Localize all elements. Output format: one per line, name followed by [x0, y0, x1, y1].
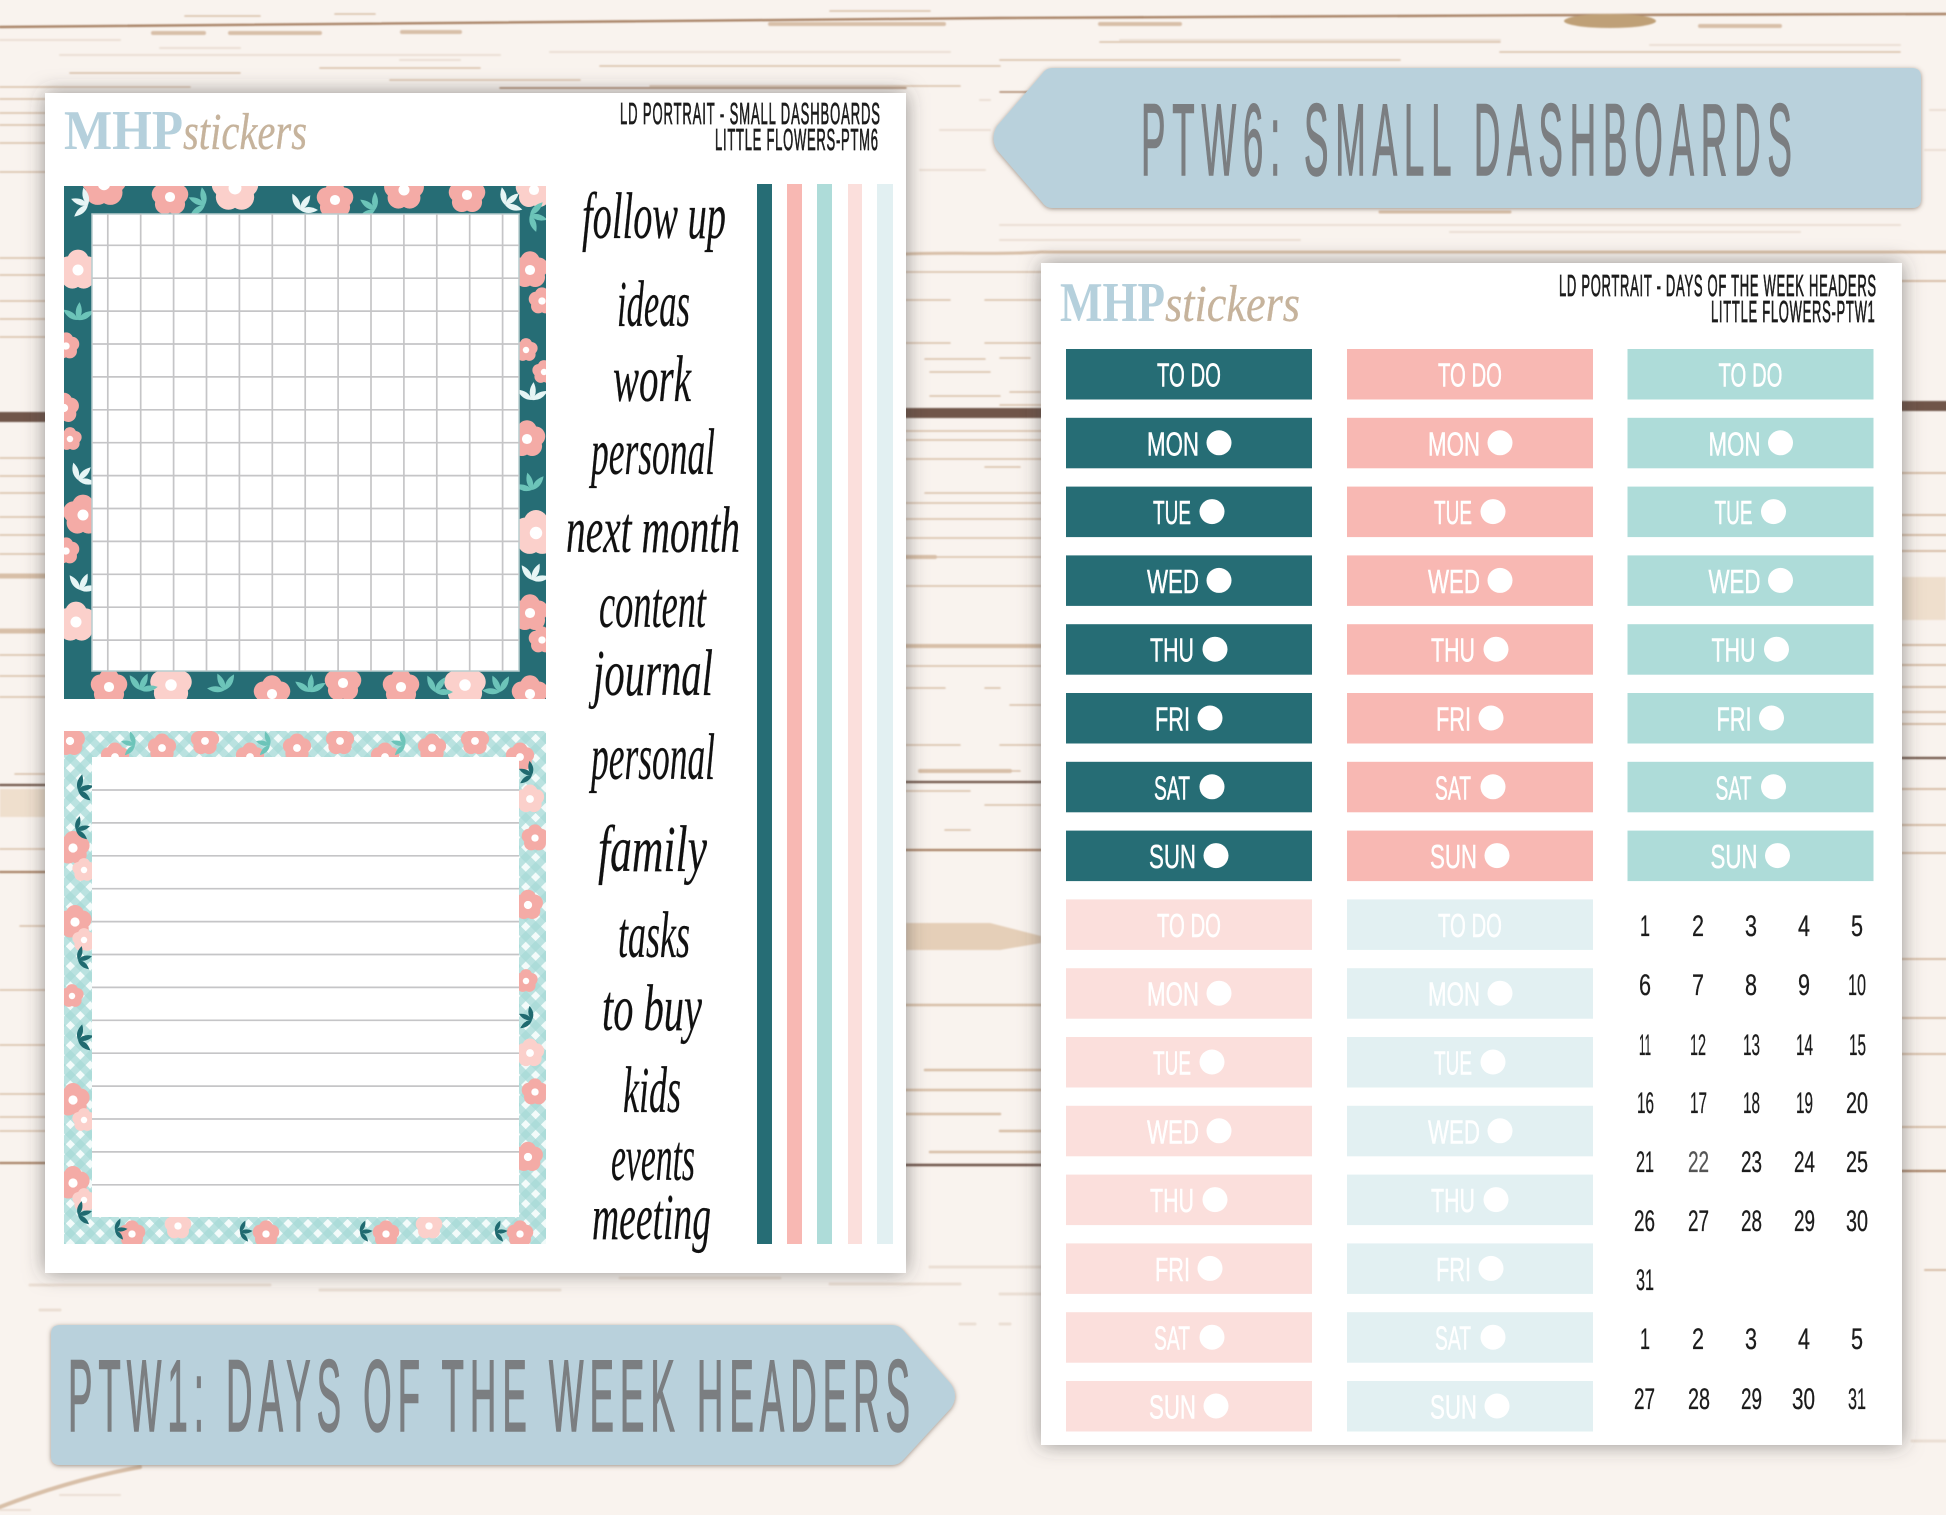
row: tue [1066, 1037, 1312, 1088]
date number stickers: 7 [1692, 969, 1704, 1002]
row: to do [1347, 899, 1593, 950]
date number stickers: 3 [1745, 910, 1757, 943]
row: tue [1347, 487, 1593, 537]
row: thu [1347, 624, 1593, 675]
row: sat: SAT [1435, 1320, 1471, 1357]
row: sat: SAT [1435, 769, 1471, 806]
date number stickers: 30 [1792, 1383, 1815, 1416]
row: thu: THU [1712, 632, 1756, 669]
row: fri: FRI [1436, 1251, 1471, 1288]
date number stickers: 1 [1640, 1323, 1650, 1356]
sheet title [620, 97, 880, 158]
date number stickers: 10 [1848, 969, 1866, 1002]
date number stickers [1634, 910, 1868, 1416]
sheet: PTW1 days of the week headers [1041, 263, 1902, 1445]
date number stickers: 3 [1745, 1323, 1757, 1356]
row: to do: TO DO [1718, 356, 1782, 394]
script word stickers: meeting [592, 1181, 711, 1254]
row: wed [1347, 555, 1593, 606]
row: to do [1066, 349, 1312, 400]
row: to do: TO DO [1157, 356, 1221, 394]
row: fri: FRI [1155, 700, 1190, 738]
row: sat [1066, 762, 1312, 812]
date number stickers: 27 [1634, 1383, 1655, 1416]
row: mon [1066, 418, 1312, 468]
date number stickers: 8 [1745, 969, 1757, 1002]
date number stickers: 22 [1688, 1146, 1709, 1179]
logo: MHP stickers [1060, 272, 1300, 334]
date number stickers: 18 [1743, 1087, 1760, 1120]
row: mon [1347, 418, 1593, 468]
row: sun: SUN [1430, 838, 1477, 875]
script word stickers: content [599, 569, 707, 642]
date number stickers: 28 [1688, 1383, 1710, 1416]
sheet title: LITTLE FLOWERS-PTM6 [715, 123, 878, 158]
row: wed: WED [1147, 1113, 1199, 1150]
date number stickers: 27 [1688, 1205, 1709, 1238]
script word stickers: family [598, 813, 707, 886]
sheet title: LD PORTRAIT - DAYS OF THE WEEK HEADERS [1559, 269, 1876, 304]
row: sat: SAT [1154, 1320, 1190, 1357]
row: wed [1066, 555, 1312, 606]
row: mon [1628, 418, 1874, 468]
row: tue [1066, 487, 1312, 537]
row: thu: THU [1431, 1182, 1475, 1219]
date number stickers: 2 [1692, 910, 1704, 943]
row: sat [1347, 762, 1593, 812]
row: tue: TUE [1434, 1044, 1472, 1082]
row: sun: SUN [1149, 838, 1196, 875]
date number stickers: 5 [1851, 1323, 1863, 1356]
row: fri [1066, 693, 1312, 744]
banner: PTW1 days of the week headers: PTW1: DAYS OF THE WEEK HEADERS [68, 1341, 910, 1454]
row: mon: MON [1428, 976, 1480, 1013]
logo: MHP stickers [64, 100, 307, 162]
row: to do: TO DO [1157, 907, 1221, 944]
date number stickers: 28 [1741, 1205, 1762, 1238]
banner: PTW6 small dashboards [994, 68, 1921, 208]
sheet: PTM6 small dashboards [45, 93, 906, 1273]
date number stickers: 11 [1639, 1029, 1651, 1062]
sheet title: LITTLE FLOWERS-PTW1 [1711, 295, 1875, 330]
row: to do [1066, 899, 1312, 950]
row: thu [1347, 1175, 1593, 1225]
date number stickers: 13 [1743, 1029, 1760, 1062]
logo: MHP stickers: stickers [183, 104, 307, 161]
row: sun: SUN [1430, 1388, 1477, 1426]
row: sat: SAT [1716, 769, 1752, 806]
row: sun: SUN [1710, 838, 1758, 875]
script word stickers: follow up [582, 180, 726, 253]
row: mon: MON [1428, 425, 1480, 462]
row: sun [1066, 831, 1312, 881]
date number stickers: 25 [1846, 1146, 1868, 1179]
date number stickers: 19 [1796, 1087, 1813, 1120]
row: sat [1628, 762, 1874, 812]
washi stripes [757, 184, 893, 1244]
date number stickers: 23 [1741, 1146, 1762, 1179]
date number stickers: 20 [1846, 1087, 1868, 1120]
script word stickers: personal [589, 416, 715, 489]
logo: MHP stickers: MHP [64, 100, 183, 162]
row: sun: SUN [1149, 1388, 1196, 1426]
row: to do: TO DO [1438, 356, 1502, 394]
logo: MHP stickers: stickers [1165, 276, 1300, 333]
row: mon: MON [1147, 425, 1199, 462]
sheet title [1559, 269, 1876, 330]
script word stickers: work [613, 343, 692, 416]
date number stickers: 31 [1636, 1264, 1654, 1297]
column: light blue headers [1347, 899, 1593, 1432]
row: wed: WED [1428, 563, 1480, 600]
date number stickers: 15 [1849, 1029, 1866, 1062]
row: sun [1347, 831, 1593, 881]
date number stickers: 2 [1692, 1323, 1704, 1356]
row: sun [1066, 1381, 1312, 1432]
row: sat [1347, 1312, 1593, 1363]
column: pink headers [1347, 349, 1593, 881]
row: tue [1347, 1037, 1593, 1088]
row: fri [1628, 693, 1874, 744]
row: wed: WED [1147, 563, 1199, 600]
date number stickers: 30 [1846, 1205, 1868, 1238]
script word stickers [566, 180, 740, 1254]
date number stickers: 1 [1640, 910, 1650, 943]
date number stickers: 24 [1794, 1146, 1815, 1179]
row: fri: FRI [1716, 700, 1752, 738]
row: thu: THU [1150, 632, 1194, 669]
sheet title: LD PORTRAIT - SMALL DASHBOARDS [620, 97, 880, 132]
script word stickers: ideas [617, 268, 690, 341]
date number stickers: 9 [1798, 969, 1810, 1002]
date number stickers: 5 [1851, 910, 1863, 943]
date number stickers: 26 [1634, 1205, 1655, 1238]
date number stickers: 31 [1848, 1383, 1866, 1416]
row: fri [1347, 1243, 1593, 1294]
script word stickers: journal [588, 637, 713, 710]
row: to do [1628, 349, 1874, 400]
date number stickers: 14 [1796, 1029, 1813, 1062]
row: thu [1066, 1175, 1312, 1225]
row: fri: FRI [1436, 700, 1471, 738]
script word stickers: to buy [602, 972, 702, 1045]
column: light pink headers [1066, 899, 1312, 1432]
script word stickers: tasks [618, 899, 690, 972]
date number stickers: 4 [1798, 910, 1810, 943]
row: mon: MON [1147, 976, 1199, 1013]
panel: teal floral grid dashboard [64, 186, 546, 699]
row: mon [1066, 968, 1312, 1019]
row: fri [1066, 1243, 1312, 1294]
row: fri: FRI [1155, 1251, 1190, 1288]
row: wed: WED [1708, 563, 1760, 600]
date number stickers: 16 [1637, 1087, 1654, 1120]
logo: MHP stickers: MHP [1060, 272, 1165, 334]
row: mon [1347, 968, 1593, 1019]
row: mon: MON [1708, 425, 1760, 462]
date number stickers: 29 [1794, 1205, 1815, 1238]
date number stickers: 17 [1690, 1087, 1707, 1120]
row: thu: THU [1431, 632, 1475, 669]
row: sat: SAT [1154, 769, 1190, 806]
row: sun [1347, 1381, 1593, 1432]
script word stickers: events [611, 1122, 695, 1195]
row: to do: TO DO [1438, 907, 1502, 944]
row: fri [1347, 693, 1593, 744]
row: sat [1066, 1312, 1312, 1363]
row: wed [1347, 1106, 1593, 1156]
date number stickers: 4 [1798, 1323, 1810, 1356]
row: wed [1066, 1106, 1312, 1156]
banner: PTW6 small dashboards: PTW6: SMALL DASHBOARDS [1141, 85, 1792, 198]
row: sun [1628, 831, 1874, 881]
row: tue: TUE [1434, 494, 1472, 531]
panel: gingham floral lined dashboard [55, 726, 548, 1246]
date number stickers: 6 [1639, 969, 1651, 1002]
row: thu [1066, 624, 1312, 675]
script word stickers: personal [589, 721, 715, 794]
row: thu [1628, 624, 1874, 675]
column: aqua headers [1628, 349, 1874, 881]
row: wed [1628, 555, 1874, 606]
row: to do [1347, 349, 1593, 400]
date number stickers: 29 [1741, 1383, 1762, 1416]
script word stickers: kids [623, 1054, 681, 1127]
date number stickers: 12 [1690, 1029, 1706, 1062]
date number stickers: 21 [1636, 1146, 1654, 1179]
row: thu: THU [1150, 1182, 1194, 1219]
row: tue [1628, 487, 1874, 537]
row: tue: TUE [1153, 494, 1191, 531]
row: tue: TUE [1714, 494, 1752, 531]
row: tue: TUE [1153, 1044, 1191, 1082]
script word stickers: next month [566, 494, 740, 567]
row: wed: WED [1428, 1113, 1480, 1150]
column: teal headers [1066, 349, 1312, 881]
